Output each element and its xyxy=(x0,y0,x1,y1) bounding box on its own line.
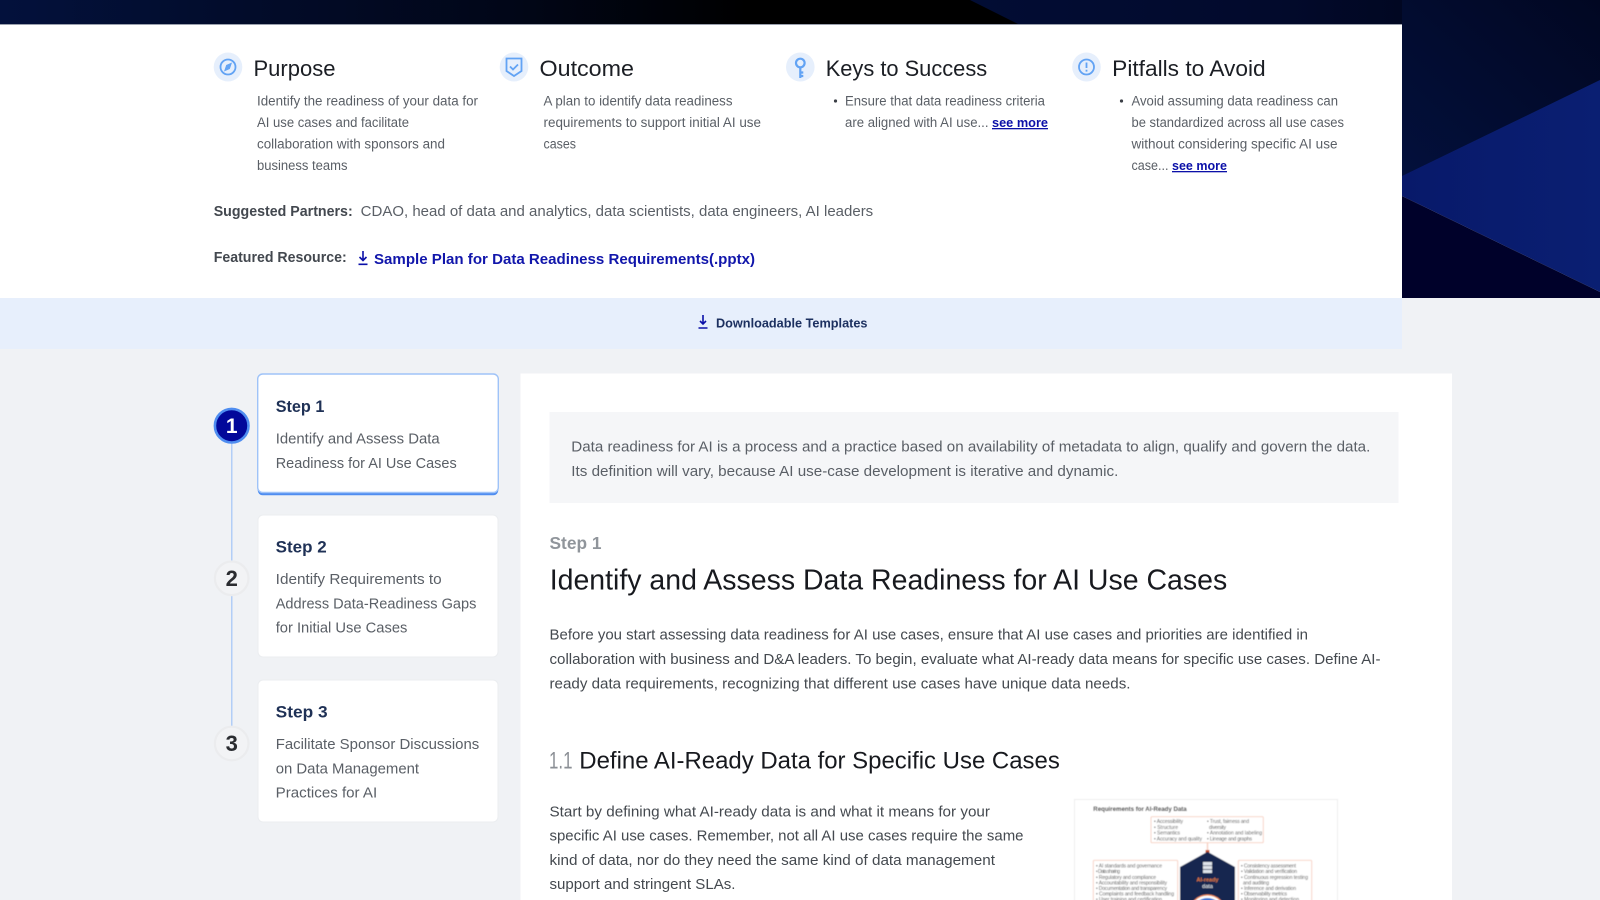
step marker 1: 1 xyxy=(226,415,238,438)
card: step 2: Step 2 xyxy=(276,539,327,557)
right requirements box: • Continuous regression testing xyxy=(1241,875,1308,881)
card: step 1: Step 1 xyxy=(276,398,324,416)
card: step 1 xyxy=(258,374,498,495)
top requirements box: • Structure xyxy=(1154,825,1178,831)
section paragraph: Start by defining what AI-ready data is and what it means for your xyxy=(550,803,990,820)
card: step 2 xyxy=(258,515,498,657)
card: step 3: Facilitate Sponsor Discussions xyxy=(276,736,479,753)
outcome text xyxy=(544,94,761,152)
hexagon: AI-ready data xyxy=(1180,852,1235,900)
card: step 3: on Data Management xyxy=(276,760,420,777)
top requirements box: • Semantics xyxy=(1154,831,1180,837)
step marker 1 xyxy=(215,409,248,443)
pitfalls text: without considering specific AI use xyxy=(1130,136,1338,152)
icon: compass xyxy=(214,52,242,82)
step marker 2: 2 xyxy=(226,566,238,591)
band label: Downloadable Templates xyxy=(716,315,868,330)
icon: alert xyxy=(1072,52,1101,82)
icon: download xyxy=(698,315,708,328)
suggested partners: Suggested Partners: xyxy=(214,204,353,220)
featured resource: Featured Resource: xyxy=(214,250,347,266)
intro paragraph: ready data requirements, recognizing that different use cases have unique data needs. xyxy=(550,675,1130,692)
heading: pitfalls to avoid: Pitfalls to Avoid xyxy=(1112,56,1266,81)
step timeline xyxy=(215,409,248,760)
section: keys to success xyxy=(786,52,1048,130)
callout: definition xyxy=(550,412,1398,503)
right requirements box: and auditing xyxy=(1243,880,1269,886)
icon: download xyxy=(358,251,368,264)
left requirements box: • Complaints and feedback handling xyxy=(1096,892,1174,898)
keys text: Ensure that data readiness criteria xyxy=(845,94,1045,108)
outcome text: A plan to identify data readiness xyxy=(544,94,733,108)
purpose text xyxy=(257,94,478,173)
panel: step detail xyxy=(520,374,1452,900)
left requirements box xyxy=(1093,860,1178,900)
section paragraph: support and stringent SLAs. xyxy=(550,876,736,893)
icon: shield xyxy=(500,52,528,82)
left requirements box: • AI standards and governance xyxy=(1096,864,1162,870)
card: step 3 xyxy=(258,680,498,822)
callout: definition: Data readiness for AI is a process and a practice based on availability of metadata to align, qualify and govern the data. xyxy=(571,440,1370,456)
card: step 2: for Initial Use Cases xyxy=(276,620,407,637)
section: pitfalls to avoid xyxy=(1072,52,1344,173)
card: step 3: Practices for AI xyxy=(276,785,377,802)
heading: keys to success: Keys to Success xyxy=(826,56,987,81)
step marker 3: 3 xyxy=(226,731,238,756)
band: downloadable templates xyxy=(0,298,1402,349)
section: purpose xyxy=(214,52,478,173)
hexagon: AI-ready data: data xyxy=(1202,884,1214,890)
featured resource xyxy=(214,250,755,268)
left requirements box: • Data sharing xyxy=(1096,869,1120,875)
top requirements box: • Accuracy and quality xyxy=(1154,836,1202,842)
connector xyxy=(1206,843,1210,854)
suggested partners: CDAO, head of data and analytics, data scientists, data engineers, AI leaders xyxy=(361,204,873,220)
purpose text: AI use cases and facilitate xyxy=(257,115,409,130)
step label: Step 1 xyxy=(550,533,602,553)
section paragraph: kind of data, nor do they need the same kind of data management xyxy=(550,852,996,869)
left requirements box: • Documentation and transparency xyxy=(1096,886,1168,892)
right requirements box: • Validation and verification xyxy=(1241,869,1297,875)
left requirements box: • Regulatory and compliance xyxy=(1096,875,1156,881)
intro paragraph xyxy=(550,627,1380,692)
panel: overview xyxy=(0,24,1402,298)
card: step 3: Step 3 xyxy=(276,704,328,722)
keys text: see more xyxy=(992,115,1048,130)
pitfalls text: Avoid assuming data readiness can xyxy=(1132,94,1338,108)
figure title: Requirements for AI-Ready Data xyxy=(1093,806,1187,813)
card: step 2: Identify Requirements to xyxy=(276,571,442,588)
top requirements box: • Trust, fairness and xyxy=(1207,819,1249,825)
hexagon: AI-ready data: AI-ready xyxy=(1196,878,1219,884)
keys text xyxy=(834,94,1048,130)
figure: requirements for AI-ready data xyxy=(1074,800,1338,900)
intro paragraph: Before you start assessing data readiness for AI use cases, ensure that AI use cases and priorities are identified in xyxy=(550,627,1308,644)
callout: definition: Its definition will vary, because AI use-case development is iterative and dynamic. xyxy=(571,464,1118,480)
subheading: 1.1: 1.1 xyxy=(549,748,572,775)
pitfalls text: see more xyxy=(1172,158,1227,173)
step marker 3 xyxy=(215,727,248,760)
icon: key xyxy=(786,52,815,82)
outcome text: cases xyxy=(544,136,576,152)
section paragraph: specific AI use cases. Remember, not all AI use cases require the same xyxy=(550,828,1024,845)
left requirements box: • Accountability and responsibility xyxy=(1096,880,1168,886)
right requirements box xyxy=(1238,860,1312,900)
right requirements box: • Consistency assessment xyxy=(1241,864,1297,870)
top requirements box: • Lineage and graphs xyxy=(1207,836,1252,842)
card: step 1: Readiness for AI Use Cases xyxy=(276,455,457,472)
purpose text: business teams xyxy=(257,158,348,173)
subheading: 1.1: Define AI-Ready Data for Specific Use Cases xyxy=(579,748,1060,775)
top requirements box: • Accessibility xyxy=(1154,819,1184,825)
card: step 2: Address Data-Readiness Gaps xyxy=(276,595,476,612)
card: step 1: Identify and Assess Data xyxy=(276,430,440,448)
purpose text: collaboration with sponsors and xyxy=(257,136,445,152)
top requirements box: diversity xyxy=(1209,825,1226,831)
heading: step title: Identify and Assess Data Readiness for AI Use Cases xyxy=(550,565,1227,597)
purpose text: Identify the readiness of your data for xyxy=(257,94,478,108)
pitfalls text xyxy=(1120,94,1344,173)
step marker 2 xyxy=(215,562,248,595)
right requirements box: • Observability metrics xyxy=(1241,892,1288,898)
intro paragraph: collaboration with business and D&A leaders. To begin, evaluate what AI-ready data means for specific use cases. Define AI- xyxy=(550,651,1380,668)
right requirements box: • Inference and derivation xyxy=(1241,886,1296,892)
outcome text: requirements to support initial AI use xyxy=(544,115,761,130)
heading: outcome: Outcome xyxy=(540,56,634,81)
top requirements box: • Annotation and labeling xyxy=(1207,831,1262,837)
heading: purpose: Purpose xyxy=(254,56,336,81)
section: outcome xyxy=(500,52,761,152)
featured resource link: Sample Plan for Data Readiness Requirements(.pptx) xyxy=(374,251,755,268)
pitfalls text: be standardized across all use cases xyxy=(1132,115,1344,130)
top requirements box xyxy=(1151,817,1263,843)
pitfalls text: case... xyxy=(1132,158,1168,173)
section paragraph xyxy=(550,803,1024,893)
keys text: are aligned with AI use... xyxy=(845,115,988,130)
hero background xyxy=(0,0,1600,298)
